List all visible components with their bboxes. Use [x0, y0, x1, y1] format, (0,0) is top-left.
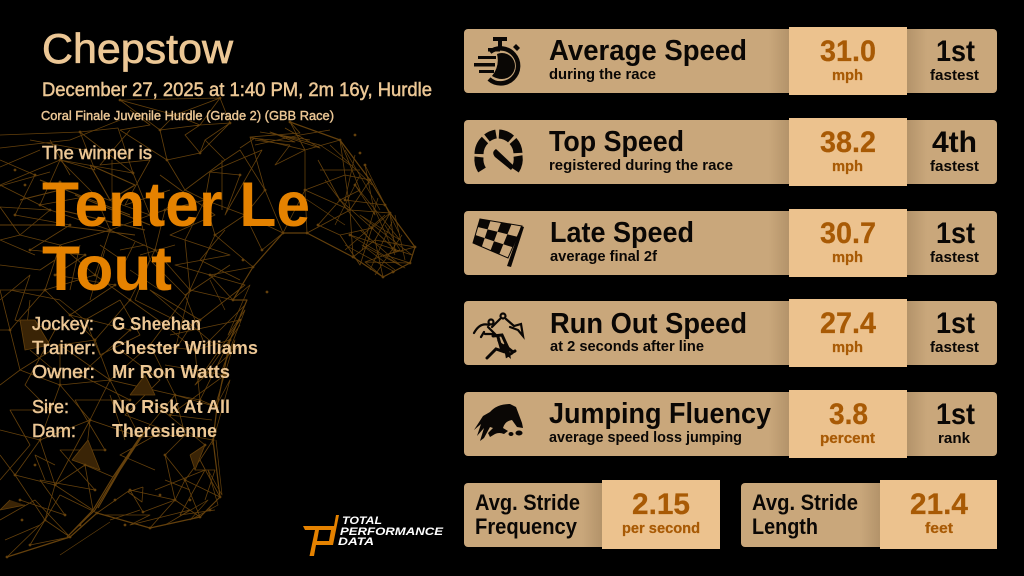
panel: late speed: [464, 209, 997, 277]
connections details: Dam:: [32, 421, 76, 441]
panel: average stride length: Length: [752, 514, 818, 539]
panel: late speed: fastest: [930, 249, 979, 266]
panel: top speed: mph: [832, 158, 863, 175]
panel: average speed: during the race: [549, 67, 656, 83]
panel: top speed: [464, 118, 997, 186]
panel: jumping fluency: percent: [820, 430, 875, 447]
panel: jumping fluency: average speed loss jumping: [549, 430, 742, 446]
panel: run out speed: at 2 seconds after line: [550, 339, 704, 355]
connections details: Jockey:: [32, 314, 94, 334]
logo: Total Performance Data: PERFORMANCE: [340, 526, 444, 538]
panel: top speed: registered during the race: [549, 158, 733, 174]
panel: average speed: fastest: [930, 67, 979, 84]
connections details: Mr Ron Watts: [112, 362, 230, 382]
panel: average stride length: 21.4: [910, 488, 968, 521]
panel: average stride frequency: per second: [622, 520, 700, 537]
panel: average stride frequency: 2.15: [632, 488, 690, 521]
panel: average speed: Average Speed: [549, 35, 747, 67]
connections details: Owner:: [32, 362, 95, 382]
connections details: Trainer:: [32, 338, 96, 358]
panel: jumping fluency: 3.8: [829, 398, 868, 431]
panel: average stride length: Avg. Stride: [752, 490, 858, 515]
panel: top speed: 38.2: [820, 126, 876, 159]
icon: jockey on horse: [474, 314, 523, 359]
panel: run out speed: [464, 299, 997, 367]
icon: stopwatch: [474, 37, 520, 83]
panel: jumping fluency: 1st: [936, 398, 975, 431]
race name: Coral Finale Juvenile Hurdle (Grade 2) (GBB Race): [41, 108, 334, 123]
panel: average stride frequency: Frequency: [475, 514, 578, 539]
winner name: Tenter Le: [42, 170, 310, 240]
panel: late speed: average final 2f: [550, 249, 657, 265]
panel: top speed: Top Speed: [549, 126, 684, 158]
panel: jumping fluency: Jumping Fluency: [549, 398, 771, 430]
panel: top speed: fastest: [930, 158, 979, 175]
winner intro: The winner is: [42, 143, 152, 163]
winner name: Tout: [42, 234, 172, 304]
background: horse network mesh: [0, 98, 415, 557]
panel: average stride length: [741, 480, 997, 549]
connections details: Chester Williams: [112, 338, 258, 358]
panel: jumping fluency: [464, 390, 997, 458]
panel: late speed: Late Speed: [550, 217, 694, 249]
race date and distance: December 27, 2025 at 1:40 PM, 2m 16y, Hurdle: [42, 79, 432, 101]
panel: average speed: [464, 27, 997, 95]
panel: top speed: 4th: [932, 126, 977, 159]
panel: average stride frequency: [464, 480, 720, 549]
panel: run out speed: mph: [832, 339, 863, 356]
connections details: [32, 314, 258, 441]
connections details: G Sheehan: [112, 314, 201, 334]
icon: checkered flag: [473, 219, 524, 267]
icon: speedometer gauge: [479, 134, 518, 170]
panel: late speed: 1st: [936, 217, 975, 250]
panel: run out speed: Run Out Speed: [550, 308, 747, 340]
connections details: No Risk At All: [112, 397, 230, 417]
panel: average stride length: feet: [925, 520, 953, 537]
connections details: Sire:: [32, 397, 69, 417]
panel: jumping fluency: rank: [938, 430, 971, 447]
logo: Total Performance Data: DATA: [338, 536, 374, 548]
panel: average stride frequency: Avg. Stride: [475, 490, 580, 515]
logo: Total Performance Data: TOTAL: [342, 515, 382, 527]
title: venue: Chepstow: [42, 25, 234, 72]
logo: Total Performance Data: [303, 515, 444, 556]
connections details: Theresienne: [112, 421, 217, 441]
winner name: [42, 170, 310, 304]
panel: run out speed: 27.4: [820, 307, 876, 340]
panel: average speed: 1st: [936, 35, 975, 68]
panel: late speed: 30.7: [820, 217, 876, 250]
panel: average speed: 31.0: [820, 35, 876, 68]
panel: average speed: mph: [832, 67, 863, 84]
panel: run out speed: 1st: [936, 307, 975, 340]
icon: leaping horse: [474, 404, 523, 441]
panel: late speed: mph: [832, 249, 863, 266]
panel: run out speed: fastest: [930, 339, 979, 356]
